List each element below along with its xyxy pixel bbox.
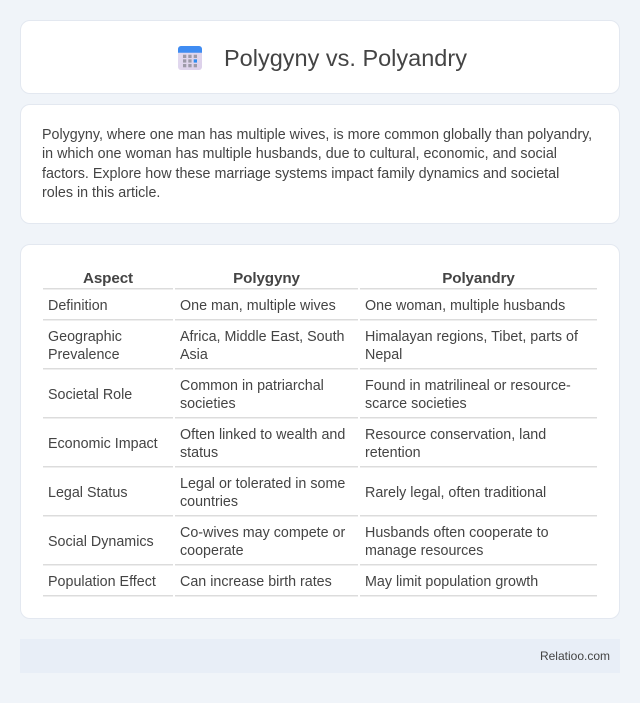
table header row — [83, 270, 515, 287]
row: legal status: Legal Status — [48, 485, 128, 501]
row: definition — [48, 298, 565, 314]
table header row: Polygyny — [233, 270, 300, 287]
row: geographic prevalence: Nepal — [365, 347, 402, 363]
row: definition: One woman, multiple husbands — [365, 298, 565, 314]
intro text — [42, 127, 592, 201]
row: definition: One man, multiple wives — [180, 298, 336, 314]
row: societal role: scarce societies — [365, 396, 467, 412]
row: population effect: May limit population growth — [365, 574, 538, 590]
row: social dynamics: Husbands often cooperate to — [365, 525, 549, 541]
intro text: Polygyny, where one man has multiple wives, is more common globally than polyandry, — [42, 127, 592, 143]
row: societal role: Common in patriarchal — [180, 378, 324, 394]
footer text: Relatioo.com — [540, 649, 610, 663]
row: social dynamics: Co-wives may compete or — [180, 525, 345, 541]
row: social dynamics: Social Dynamics — [48, 534, 154, 550]
row: societal role: Societal Role — [48, 387, 132, 403]
intro text: roles in this article. — [42, 185, 160, 201]
row: social dynamics: cooperate — [180, 543, 244, 559]
row: economic impact: Often linked to wealth and — [180, 427, 345, 443]
panel: table card — [20, 244, 620, 619]
row: geographic prevalence: Africa, Middle East, South — [180, 329, 344, 345]
comparison table — [43, 270, 597, 597]
intro text: in which one woman has multiple husbands, due to cultural, economic, and social — [42, 146, 557, 162]
row: economic impact: retention — [365, 445, 421, 461]
row: legal status: countries — [180, 494, 238, 510]
row: economic impact: status — [180, 445, 218, 461]
footer bar — [20, 639, 620, 673]
row: legal status: Legal or tolerated in some — [180, 476, 345, 492]
table header row: Polyandry — [442, 270, 515, 287]
row: social dynamics: manage resources — [365, 543, 483, 559]
panel: intro card — [20, 104, 620, 224]
row: legal status — [48, 476, 546, 510]
row: geographic prevalence: Himalayan regions, Tibet, parts of — [365, 329, 578, 345]
row: economic impact — [48, 427, 546, 461]
row: societal role — [48, 378, 571, 412]
row: definition: Definition — [48, 298, 108, 314]
row: social dynamics — [48, 525, 549, 559]
row: societal role: societies — [180, 396, 236, 412]
row: legal status: Rarely legal, often traditional — [365, 485, 546, 501]
icon: calendar — [178, 46, 202, 70]
row: societal role: Found in matrilineal or resource- — [365, 378, 571, 394]
row: geographic prevalence: Geographic — [48, 329, 122, 345]
title: Polygyny vs. Polyandry — [224, 45, 467, 71]
row: population effect: Can increase birth rates — [180, 574, 332, 590]
row: population effect: Population Effect — [48, 574, 156, 590]
row: economic impact: Resource conservation, land — [365, 427, 546, 443]
table header row: Aspect — [83, 270, 133, 287]
row: geographic prevalence — [48, 329, 578, 363]
row: population effect — [48, 574, 538, 590]
row: geographic prevalence: Asia — [180, 347, 208, 363]
panel: title card — [20, 20, 620, 94]
row: geographic prevalence: Prevalence — [48, 347, 120, 363]
row: economic impact: Economic Impact — [48, 436, 158, 452]
intro text: factors. Explore how these marriage systems impact family dynamics and societal — [42, 166, 559, 182]
